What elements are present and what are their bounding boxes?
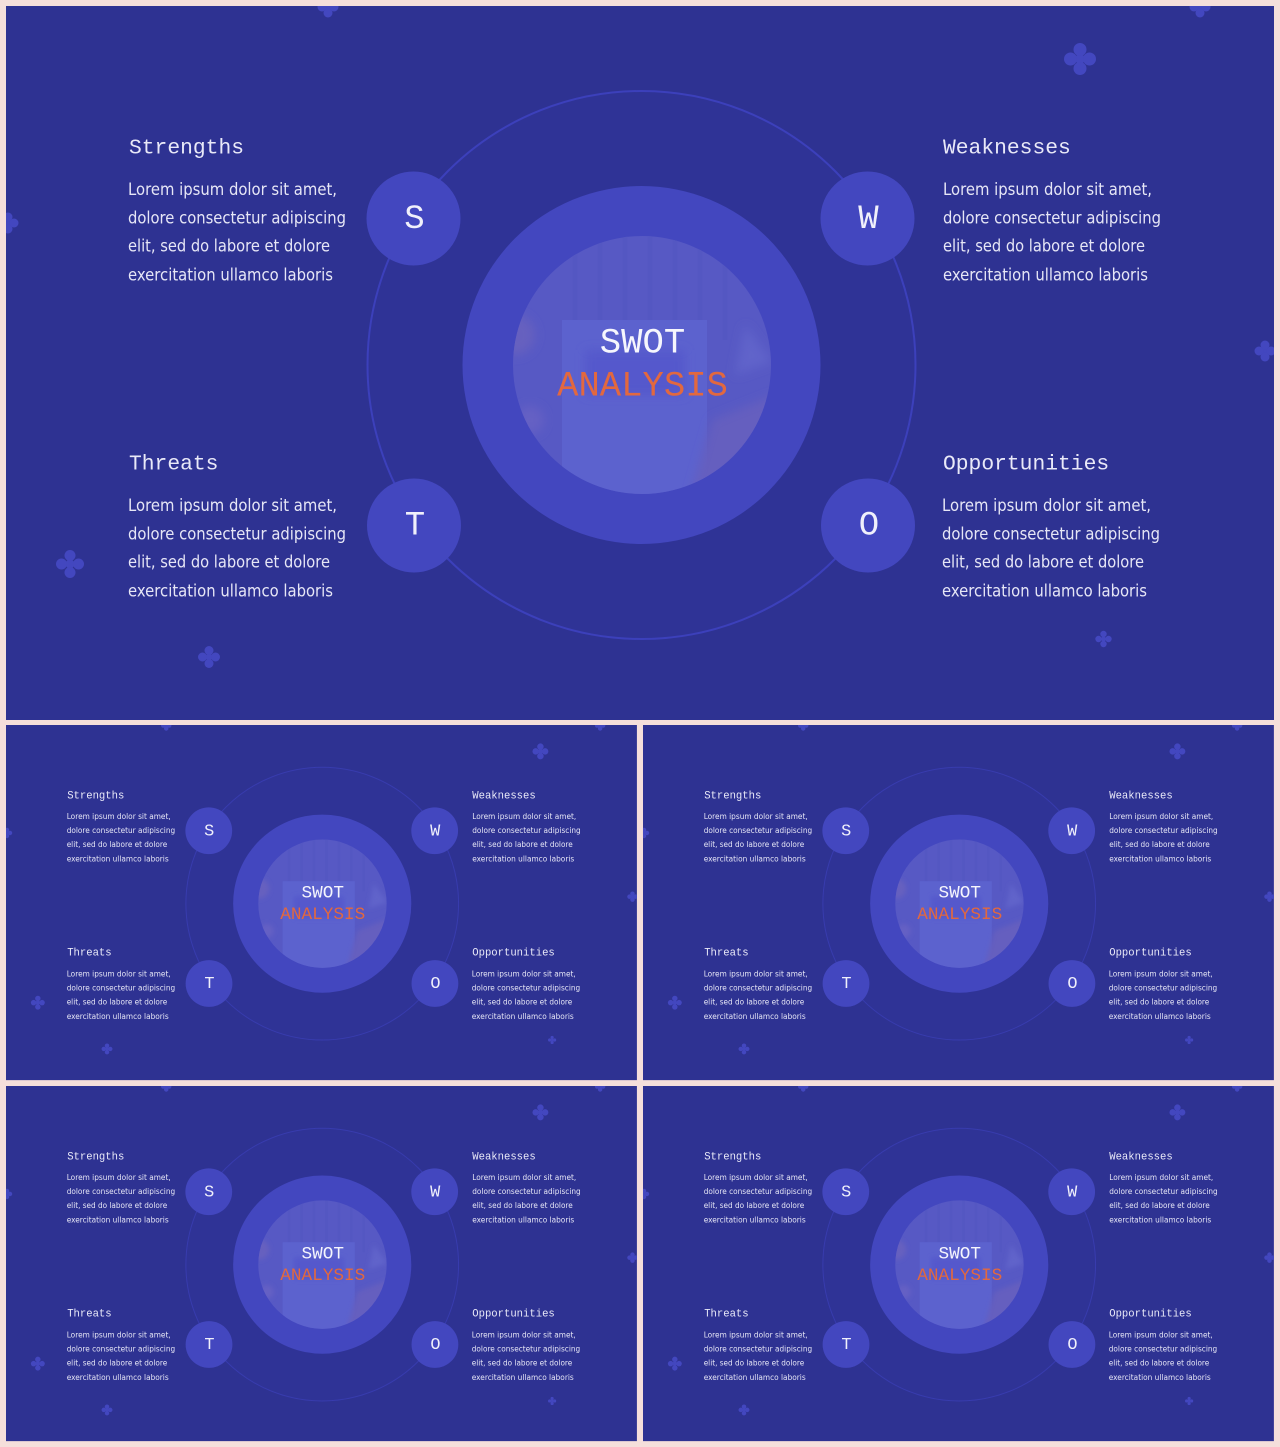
- text block: Threats: elit, sed do labore et dolore: [128, 552, 330, 572]
- text block: Weaknesses: [943, 136, 1161, 284]
- text block: Opportunities: dolore consectetur adipiscing: [1109, 1343, 1217, 1353]
- text block: Weaknesses: [472, 1151, 581, 1225]
- text block: Weaknesses: Weaknesses: [1109, 1151, 1173, 1163]
- circle badge: O: O: [430, 975, 441, 994]
- text block: Threats: Lorem ipsum dolor sit amet,: [67, 968, 171, 978]
- text block: Weaknesses: Weaknesses: [1109, 790, 1173, 802]
- text block: Strengths: Lorem ipsum dolor sit amet,: [704, 1172, 808, 1182]
- text block: Threats: elit, sed do labore et dolore: [704, 996, 804, 1006]
- text block: Opportunities: exercitation ullamco laboris: [472, 1011, 574, 1021]
- title: SWOT: [301, 1244, 344, 1264]
- title: [917, 886, 1002, 919]
- central disc: [233, 815, 411, 993]
- title: SWOT: [938, 1244, 981, 1264]
- circle badge: O: [1049, 960, 1095, 1007]
- central disc: [870, 815, 1048, 993]
- text block: Opportunities: Lorem ipsum dolor sit amet,: [1109, 1329, 1213, 1339]
- text block: Strengths: [128, 136, 346, 284]
- circle badge: O: [1049, 1321, 1095, 1368]
- text block: Threats: Lorem ipsum dolor sit amet,: [704, 1329, 808, 1339]
- orbit ring: [186, 1128, 459, 1401]
- text block: Weaknesses: exercitation ullamco laboris: [1109, 854, 1211, 864]
- text block: Strengths: Lorem ipsum dolor sit amet,: [704, 811, 808, 821]
- photo circle: [249, 1198, 389, 1331]
- text block: Threats: elit, sed do labore et dolore: [704, 1357, 804, 1367]
- text block: Strengths: Strengths: [67, 790, 124, 802]
- central disc: [233, 1176, 411, 1354]
- text block: Strengths: exercitation ullamco laboris: [67, 1215, 169, 1225]
- circle badge: T: [186, 960, 232, 1007]
- text block: Threats: exercitation ullamco laboris: [704, 1372, 806, 1382]
- circle badge: T: T: [841, 1336, 852, 1355]
- text block: Weaknesses: [472, 790, 581, 864]
- title: [917, 1244, 1002, 1286]
- circle badge: S: [185, 1168, 232, 1215]
- photo circle: [258, 840, 386, 968]
- text block: Threats: Threats: [704, 1309, 749, 1321]
- text block: Threats: dolore consectetur adipiscing: [704, 1343, 812, 1353]
- circle badge: O: [412, 1321, 458, 1368]
- text block: Strengths: exercitation ullamco laboris: [704, 854, 806, 864]
- text block: Threats: elit, sed do labore et dolore: [67, 1357, 167, 1367]
- panel: large SWOT slide: [0, 0, 1276, 720]
- text block: Weaknesses: dolore consectetur adipiscing: [943, 208, 1161, 228]
- text block: Opportunities: [942, 452, 1160, 600]
- decorative flower icons: [0, 0, 1276, 668]
- circle badge: O: [821, 478, 915, 572]
- title: [557, 328, 726, 396]
- circle badge: S: S: [404, 201, 425, 239]
- circle badge: W: W: [1067, 822, 1078, 841]
- panel: small slide top left: [2, 720, 638, 1080]
- text block: Threats: Threats: [704, 948, 749, 960]
- text block: Weaknesses: Weaknesses: [943, 136, 1071, 160]
- text block: Threats: exercitation ullamco laboris: [128, 580, 333, 600]
- text block: Threats: Lorem ipsum dolor sit amet,: [704, 968, 808, 978]
- text block: Weaknesses: dolore consectetur adipiscing: [1109, 825, 1218, 835]
- panel: small slide bottom left: [2, 1081, 638, 1441]
- title: [280, 1244, 365, 1286]
- text block: Threats: exercitation ullamco laboris: [67, 1372, 169, 1382]
- circle badge: S: S: [204, 822, 214, 841]
- circle badge: T: [186, 1321, 232, 1368]
- text block: Strengths: [704, 790, 812, 864]
- text block: Opportunities: [472, 948, 580, 1021]
- text block: Weaknesses: exercitation ullamco laboris: [1109, 1215, 1211, 1225]
- text block: Weaknesses: exercitation ullamco laboris: [472, 854, 574, 864]
- text block: Strengths: Lorem ipsum dolor sit amet,: [67, 1172, 171, 1182]
- text block: Strengths: dolore consectetur adipiscing: [67, 1186, 175, 1196]
- text block: Opportunities: Lorem ipsum dolor sit amet,: [1109, 968, 1213, 978]
- text block: Threats: [704, 948, 812, 1021]
- title: SWOT: [938, 883, 981, 903]
- text block: Weaknesses: elit, sed do labore et dolore: [472, 839, 573, 849]
- decorative flower icons: [639, 1081, 1275, 1415]
- text block: Strengths: exercitation ullamco laboris: [67, 854, 169, 864]
- text block: Opportunities: Lorem ipsum dolor sit amet,: [472, 968, 576, 978]
- circle badge: S: [185, 807, 232, 854]
- text block: Strengths: dolore consectetur adipiscing: [67, 825, 175, 835]
- circle badge: O: [412, 960, 458, 1007]
- text block: Weaknesses: Lorem ipsum dolor sit amet,: [1109, 811, 1213, 821]
- panel: small slide top right: [639, 720, 1275, 1080]
- decorative flower icons: [2, 720, 638, 1054]
- text block: Opportunities: exercitation ullamco laboris: [472, 1372, 574, 1382]
- circle badge: S: [822, 807, 869, 854]
- text block: Opportunities: exercitation ullamco laboris: [1109, 1372, 1211, 1382]
- text block: Opportunities: exercitation ullamco laboris: [1109, 1011, 1211, 1021]
- central disc: [462, 186, 820, 544]
- text block: Opportunities: dolore consectetur adipiscing: [472, 982, 580, 992]
- title: SWOT: [301, 883, 344, 903]
- text block: Opportunities: [1109, 948, 1217, 1021]
- text block: Strengths: elit, sed do labore et dolore: [67, 839, 167, 849]
- text block: Threats: dolore consectetur adipiscing: [67, 1343, 175, 1353]
- circle badge: S: [366, 172, 460, 266]
- title: SWOT: [600, 322, 685, 364]
- circle badge: T: T: [204, 1336, 215, 1355]
- title: [280, 886, 364, 919]
- central disc: [870, 1176, 1048, 1354]
- text block: Opportunities: [472, 1309, 580, 1382]
- text block: Strengths: exercitation ullamco laboris: [128, 264, 333, 284]
- text block: Opportunities: Opportunities: [1109, 1309, 1192, 1321]
- text block: Threats: dolore consectetur adipiscing: [128, 524, 346, 544]
- text block: Threats: dolore consectetur adipiscing: [704, 982, 812, 992]
- circle badge: T: T: [841, 975, 852, 994]
- circle badge: W: W: [1067, 1183, 1078, 1202]
- circle badge: W: W: [430, 1183, 441, 1202]
- circle badge: O: O: [1067, 1336, 1077, 1355]
- text block: Opportunities: Lorem ipsum dolor sit amet,: [942, 495, 1151, 515]
- orbit ring: [823, 1128, 1096, 1401]
- text block: Opportunities: Opportunities: [472, 948, 555, 960]
- circle badge: O: O: [1067, 975, 1077, 994]
- title: ANALYSIS: [280, 1266, 365, 1286]
- text block: Strengths: Strengths: [704, 790, 761, 802]
- orbit ring: [823, 767, 1096, 1040]
- text block: Threats: Lorem ipsum dolor sit amet,: [128, 495, 337, 515]
- text block: Threats: exercitation ullamco laboris: [67, 1011, 169, 1021]
- text block: Opportunities: dolore consectetur adipiscing: [942, 524, 1160, 544]
- circle badge: T: [823, 960, 869, 1007]
- text block: Weaknesses: dolore consectetur adipiscing: [472, 1186, 581, 1196]
- photo circle: [895, 840, 1024, 968]
- orbit ring: [368, 91, 916, 639]
- decorative flower icons: [639, 720, 1275, 1054]
- text block: Opportunities: elit, sed do labore et dolore: [1109, 996, 1209, 1006]
- text block: Weaknesses: Weaknesses: [472, 1151, 536, 1163]
- text block: Threats: exercitation ullamco laboris: [704, 1011, 806, 1021]
- circle badge: W: [1048, 807, 1095, 854]
- text block: Threats: Threats: [67, 948, 112, 960]
- text block: Threats: [67, 948, 175, 1021]
- text block: Strengths: dolore consectetur adipiscing: [128, 208, 346, 228]
- circle badge: W: [411, 1168, 458, 1215]
- text block: Strengths: elit, sed do labore et dolore: [67, 1200, 167, 1210]
- circle badge: W: [411, 807, 458, 854]
- panel: small slide bottom right: [639, 1081, 1275, 1441]
- text block: Weaknesses: dolore consectetur adipiscing: [1109, 1186, 1218, 1196]
- text block: Strengths: Lorem ipsum dolor sit amet,: [67, 811, 171, 821]
- text block: Opportunities: elit, sed do labore et dolore: [472, 996, 572, 1006]
- decorative flower icons: [2, 1081, 638, 1415]
- text block: Threats: Threats: [129, 452, 218, 476]
- circle badge: S: S: [204, 1183, 214, 1202]
- text block: Opportunities: Opportunities: [472, 1309, 555, 1321]
- text block: Strengths: Strengths: [67, 1151, 124, 1163]
- circle badge: T: [367, 478, 461, 572]
- title: ANALYSIS: [917, 905, 1002, 925]
- text block: Weaknesses: dolore consectetur adipiscing: [472, 825, 581, 835]
- circle badge: O: O: [430, 1336, 441, 1355]
- text block: Opportunities: Lorem ipsum dolor sit amet,: [472, 1329, 576, 1339]
- photo circle: [513, 236, 771, 494]
- text block: Strengths: elit, sed do labore et dolore: [128, 236, 330, 256]
- text block: Weaknesses: [1109, 790, 1218, 864]
- text block: Opportunities: [1109, 1309, 1217, 1382]
- text block: Opportunities: elit, sed do labore et dolore: [1109, 1357, 1209, 1367]
- text block: Opportunities: dolore consectetur adipiscing: [472, 1343, 580, 1353]
- text block: Threats: [704, 1309, 812, 1382]
- text block: Strengths: elit, sed do labore et dolore: [704, 839, 804, 849]
- text block: Threats: Lorem ipsum dolor sit amet,: [67, 1329, 171, 1339]
- text block: Opportunities: dolore consectetur adipiscing: [1109, 982, 1217, 992]
- title: ANALYSIS: [557, 366, 728, 406]
- circle badge: S: S: [841, 822, 851, 841]
- text block: Strengths: [67, 1151, 175, 1225]
- text block: Threats: dolore consectetur adipiscing: [67, 982, 175, 992]
- text block: Strengths: dolore consectetur adipiscing: [704, 1186, 812, 1196]
- circle badge: O: O: [859, 508, 879, 546]
- circle badge: W: [1048, 1168, 1095, 1215]
- circle badge: W: W: [430, 822, 441, 841]
- circle badge: T: T: [405, 508, 425, 546]
- text block: Weaknesses: Weaknesses: [472, 790, 536, 802]
- text block: Weaknesses: exercitation ullamco laboris: [472, 1215, 574, 1225]
- text block: Weaknesses: Lorem ipsum dolor sit amet,: [472, 1172, 576, 1182]
- text block: Opportunities: Opportunities: [943, 452, 1109, 476]
- text block: Weaknesses: elit, sed do labore et dolore: [472, 1200, 573, 1210]
- circle badge: W: [820, 172, 914, 266]
- text block: Weaknesses: elit, sed do labore et dolore: [1109, 1200, 1210, 1210]
- text block: Strengths: dolore consectetur adipiscing: [704, 825, 812, 835]
- text block: Weaknesses: Lorem ipsum dolor sit amet,: [943, 179, 1152, 199]
- circle badge: W: W: [858, 201, 879, 239]
- text block: Weaknesses: Lorem ipsum dolor sit amet,: [472, 811, 576, 821]
- text block: Strengths: Strengths: [704, 1151, 761, 1163]
- circle badge: S: S: [841, 1183, 851, 1202]
- circle badge: T: [823, 1321, 869, 1368]
- photo circle: [886, 1198, 1026, 1331]
- text block: Strengths: Lorem ipsum dolor sit amet,: [128, 179, 337, 199]
- text block: Threats: [128, 452, 346, 600]
- text block: Weaknesses: [1109, 1151, 1218, 1225]
- title: ANALYSIS: [917, 1266, 1002, 1286]
- text block: Opportunities: Opportunities: [1109, 948, 1192, 960]
- text block: Opportunities: elit, sed do labore et dolore: [472, 1357, 572, 1367]
- text block: Threats: Threats: [67, 1309, 112, 1321]
- title: ANALYSIS: [280, 905, 365, 925]
- text block: Strengths: [704, 1151, 812, 1225]
- text block: Opportunities: exercitation ullamco laboris: [942, 580, 1147, 600]
- text block: Strengths: Strengths: [129, 136, 244, 160]
- text block: Weaknesses: Lorem ipsum dolor sit amet,: [1109, 1172, 1213, 1182]
- text block: Weaknesses: exercitation ullamco laboris: [943, 264, 1148, 284]
- text block: Threats: [67, 1309, 175, 1382]
- text block: Strengths: [67, 790, 175, 864]
- text block: Strengths: elit, sed do labore et dolore: [704, 1200, 804, 1210]
- text block: Weaknesses: elit, sed do labore et dolore: [1109, 839, 1210, 849]
- text block: Opportunities: elit, sed do labore et dolore: [942, 552, 1144, 572]
- orbit ring: [186, 767, 459, 1040]
- text block: Weaknesses: elit, sed do labore et dolore: [943, 236, 1145, 256]
- text block: Threats: elit, sed do labore et dolore: [67, 996, 167, 1006]
- circle badge: S: [822, 1168, 869, 1215]
- circle badge: T: T: [204, 975, 215, 994]
- text block: Strengths: exercitation ullamco laboris: [704, 1215, 806, 1225]
